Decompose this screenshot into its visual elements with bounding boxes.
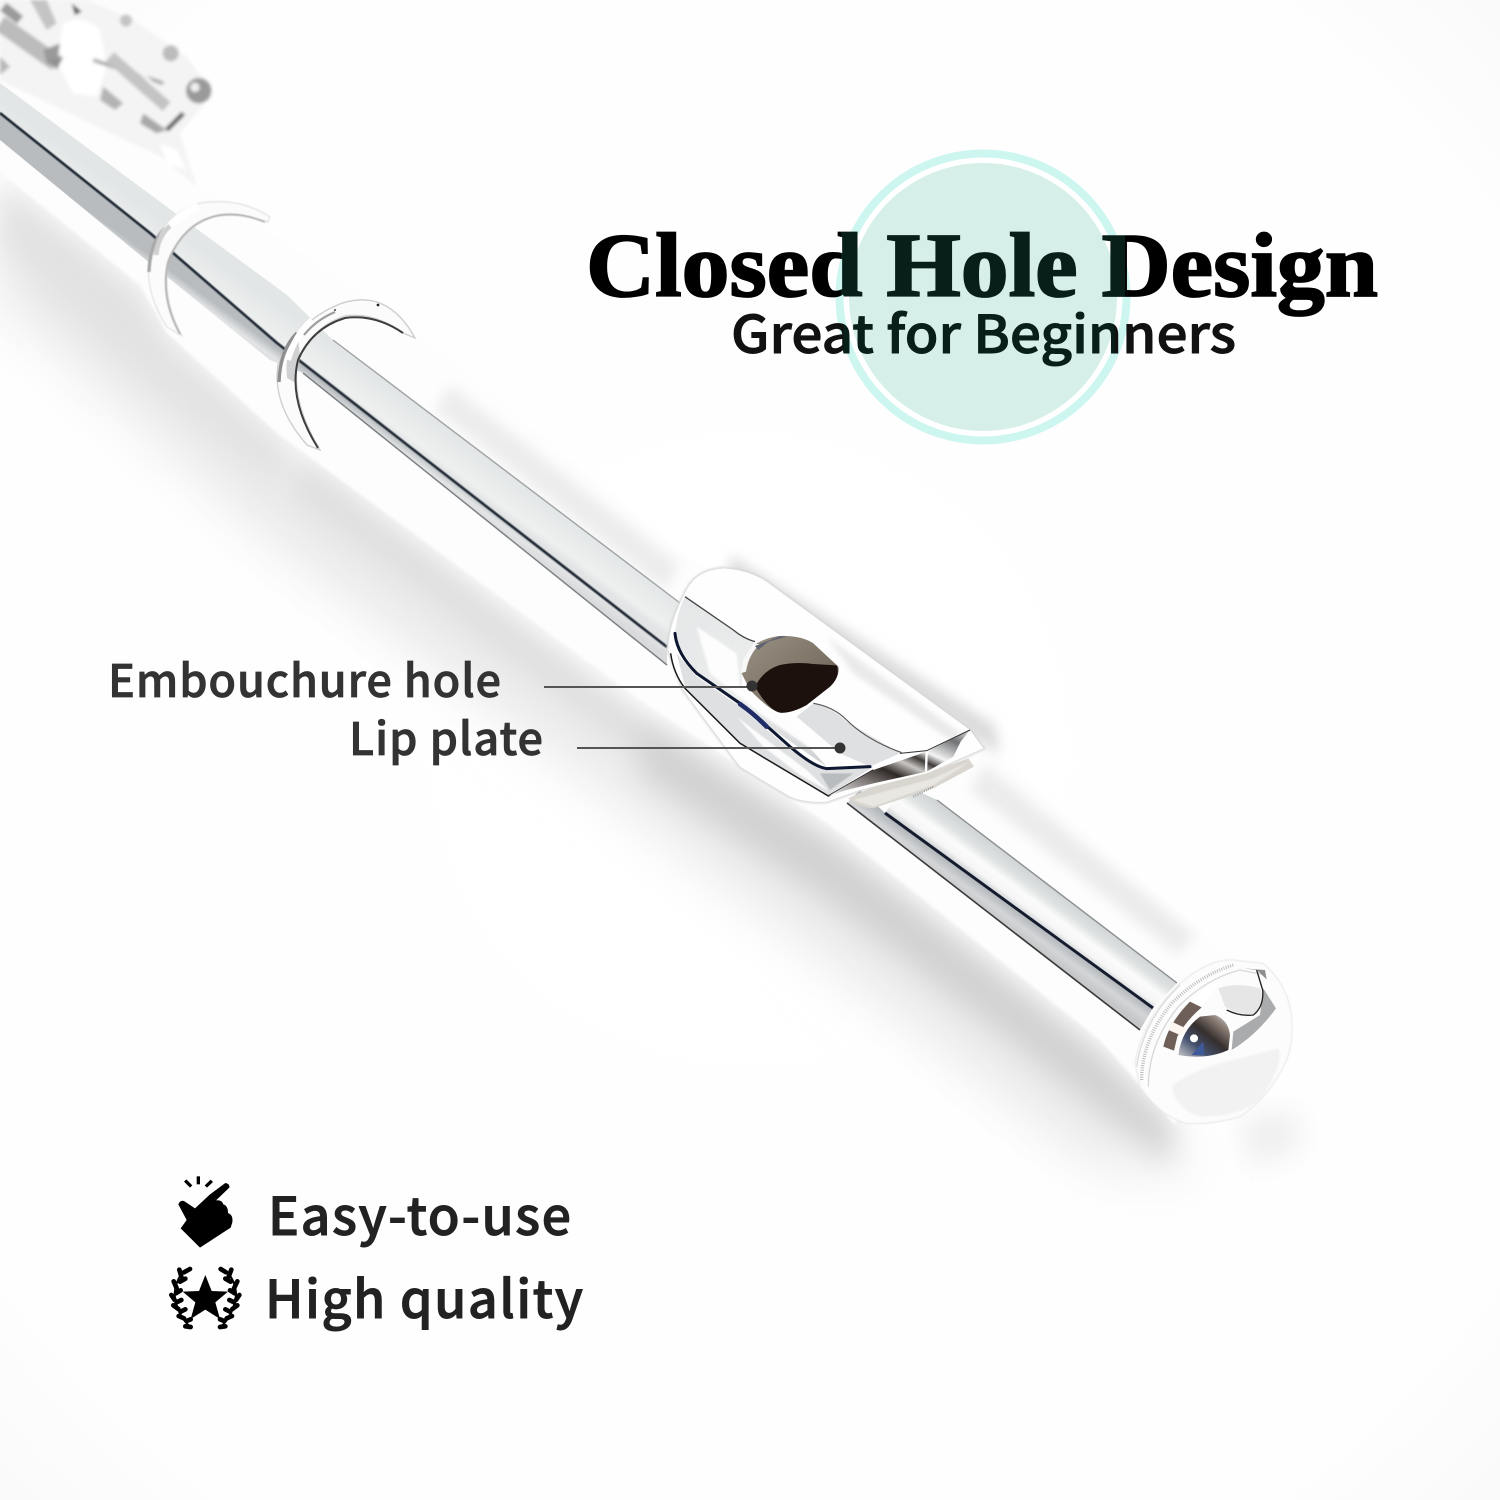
label: high quality: High quality (265, 1258, 583, 1333)
callout: lip plate: Lip plate (349, 703, 543, 768)
label: easy to use: Easy-to-use (268, 1175, 571, 1250)
tube shadow (0, 180, 1300, 1165)
lower reflection band, right section (847, 790, 1153, 1030)
riser chrome edge (828, 730, 970, 796)
lower dome tint (1172, 1048, 1280, 1117)
tube body (0, 60, 1240, 1125)
tube ring 1 (148, 202, 270, 336)
upper grey reflection band, left section (0, 83, 1177, 1030)
keywork at top left (0, 0, 213, 187)
dark curved lines on the lip plate (675, 633, 870, 769)
callout: embouchure hole (108, 645, 758, 710)
icon: pointing hand (178, 1176, 232, 1248)
lower reflection band, left section (0, 113, 667, 665)
subtitle: Great for Beginners (731, 293, 1236, 368)
faint shading beyond the hole (827, 637, 963, 740)
white highlight on lip (697, 627, 827, 760)
beaded collar (1142, 965, 1233, 1080)
chrome strip on collar (1163, 1002, 1202, 1051)
upper tube shading (435, 385, 1195, 955)
title: Closed Hole Design (586, 215, 1378, 316)
reflection right of hole (797, 703, 900, 767)
upper grey reflection band, right section (885, 785, 1177, 1008)
lip plate assembly (668, 568, 983, 808)
tube ring 2 (277, 300, 415, 450)
reflection left of hole (675, 597, 827, 767)
metal lower edge (677, 653, 873, 796)
lip plate outer shape (668, 568, 983, 802)
teal circle badge (840, 154, 1126, 440)
callout: lip plate (349, 703, 846, 768)
chrome dome reflection (1178, 1015, 1230, 1057)
lip plate soft edge (668, 568, 983, 802)
tenon collar under the lip plate (848, 758, 974, 808)
thin lines along the tube (0, 113, 1177, 1030)
callout: embouchure hole: Embouchure hole (108, 645, 501, 710)
icon: laurel star (171, 1269, 239, 1328)
flute photo (0, 0, 1300, 1170)
cap outer shape (1135, 960, 1292, 1124)
broad soft shadow (0, 200, 1200, 1170)
grey reflection on dome (1232, 988, 1276, 1050)
end cap (1135, 960, 1292, 1124)
embouchure hole (741, 636, 839, 713)
